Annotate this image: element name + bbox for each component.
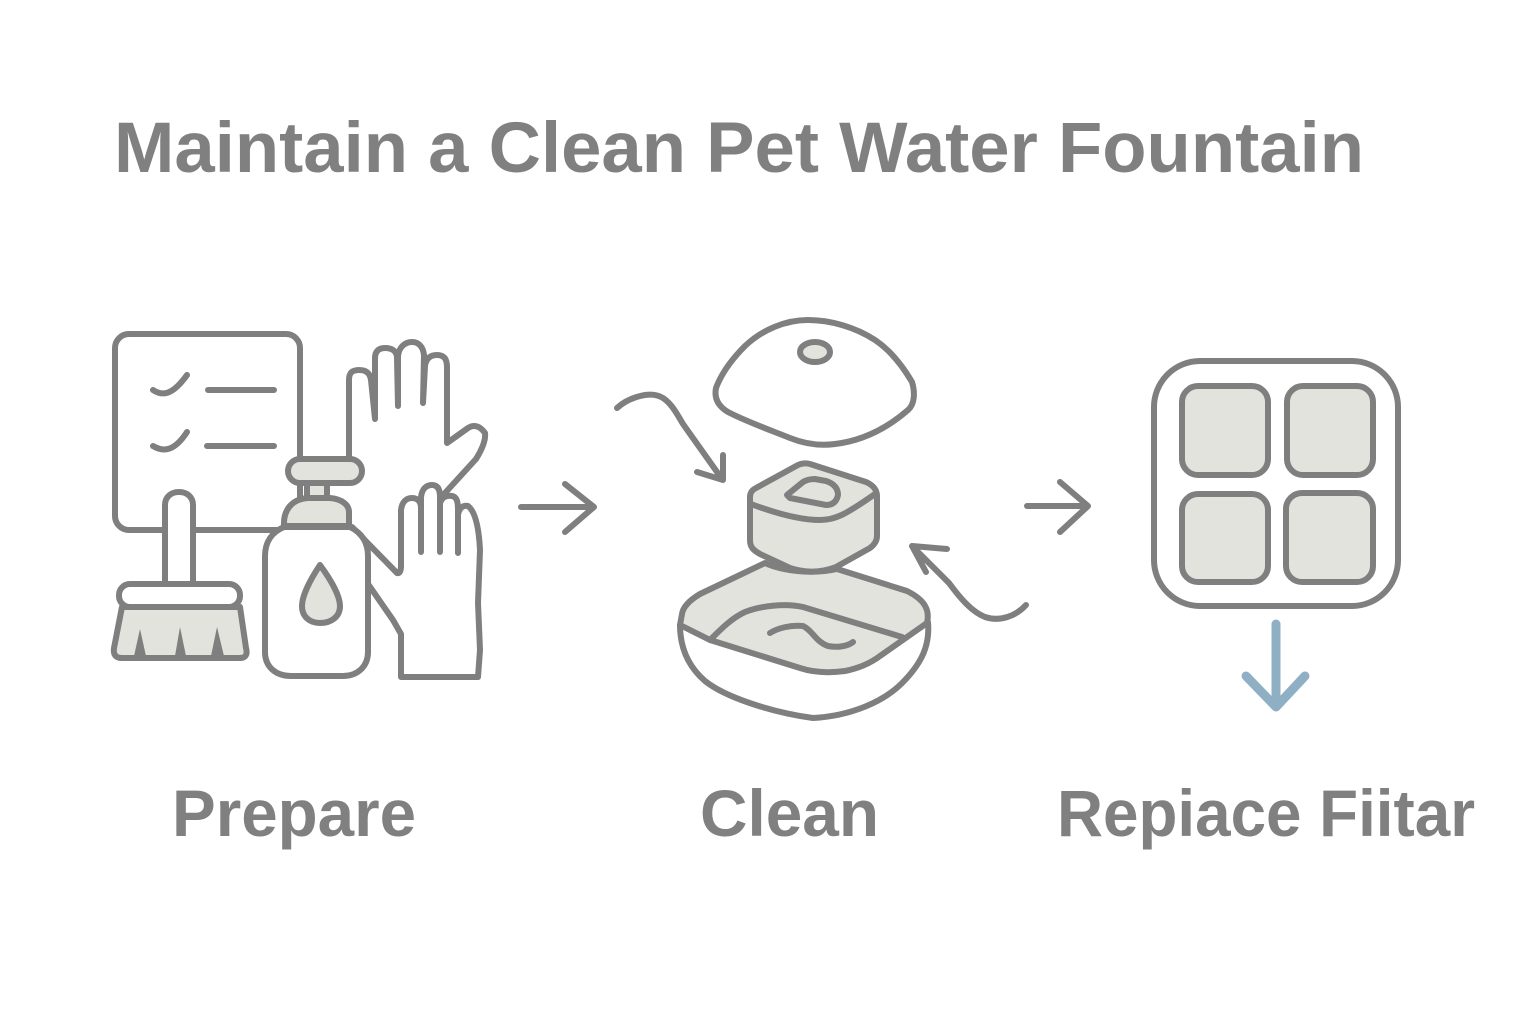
arrow: clean to filter bbox=[1027, 482, 1088, 532]
icon: soap bottle bbox=[265, 459, 368, 676]
arrow: curved down to pump bbox=[617, 395, 723, 480]
icon: pump block bbox=[750, 463, 877, 572]
label: clean: Clean bbox=[700, 776, 879, 850]
icon: upper glove bbox=[349, 342, 485, 493]
arrow: curved up to pump bbox=[912, 546, 1026, 619]
icon: checklist bbox=[115, 334, 300, 530]
arrow: remove filter down bbox=[1246, 624, 1305, 707]
icon: brush bbox=[114, 492, 247, 658]
icon: lower glove bbox=[352, 485, 480, 677]
label: prepare: Prepare bbox=[172, 776, 416, 850]
icon: filter grid bbox=[1154, 361, 1398, 606]
icon: prepare supplies bbox=[114, 334, 485, 677]
icon: fountain lid bbox=[716, 320, 914, 445]
icon: fountain exploded view bbox=[617, 320, 1026, 718]
icon: fountain bowl bbox=[680, 563, 928, 718]
title: Maintain a Clean Pet Water Fountain bbox=[114, 109, 1364, 188]
arrow: prepare to clean bbox=[521, 484, 594, 532]
label: replace filter: Repiace Fiitar bbox=[1057, 776, 1475, 850]
